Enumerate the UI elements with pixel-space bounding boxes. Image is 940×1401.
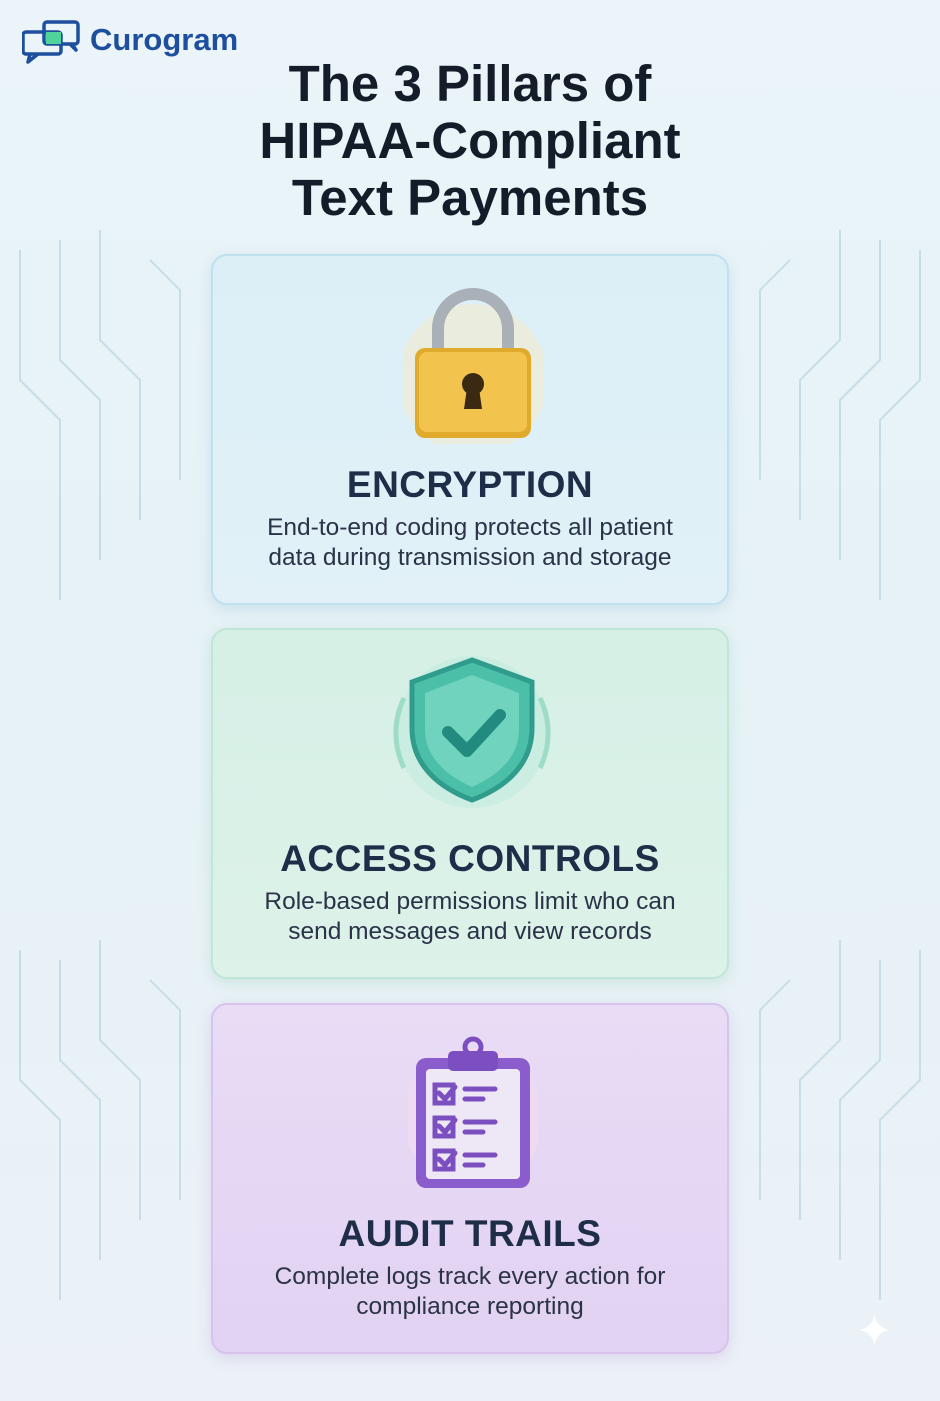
icon: lock bbox=[403, 288, 543, 444]
description: Role-based permissions limit who can bbox=[264, 888, 676, 915]
description bbox=[275, 1263, 665, 1320]
title: The 3 Pillars of bbox=[289, 55, 651, 112]
icon: shield bbox=[394, 656, 550, 808]
description: Complete logs track every action for bbox=[275, 1263, 665, 1290]
panel: access controls bbox=[211, 628, 729, 979]
description: data during transmission and storage bbox=[268, 544, 672, 571]
heading: ENCRYPTION bbox=[347, 464, 593, 505]
title: HIPAA-Compliant bbox=[259, 112, 681, 169]
description: End-to-end coding protects all patient bbox=[267, 514, 673, 541]
heading: ACCESS CONTROLS bbox=[280, 838, 660, 879]
description bbox=[264, 888, 676, 945]
description: compliance reporting bbox=[356, 1293, 584, 1320]
icon: sparkle: ✦ bbox=[856, 1307, 893, 1356]
heading: AUDIT TRAILS bbox=[339, 1213, 601, 1254]
description: send messages and view records bbox=[288, 918, 652, 945]
title: Text Payments bbox=[292, 169, 648, 226]
logo: Curogram bbox=[90, 22, 238, 57]
panel: encryption bbox=[211, 254, 729, 605]
icon: clipboard bbox=[416, 1036, 530, 1188]
title bbox=[259, 55, 681, 226]
panel: audit trails bbox=[211, 1003, 729, 1354]
logo bbox=[22, 20, 238, 64]
description bbox=[267, 514, 673, 571]
